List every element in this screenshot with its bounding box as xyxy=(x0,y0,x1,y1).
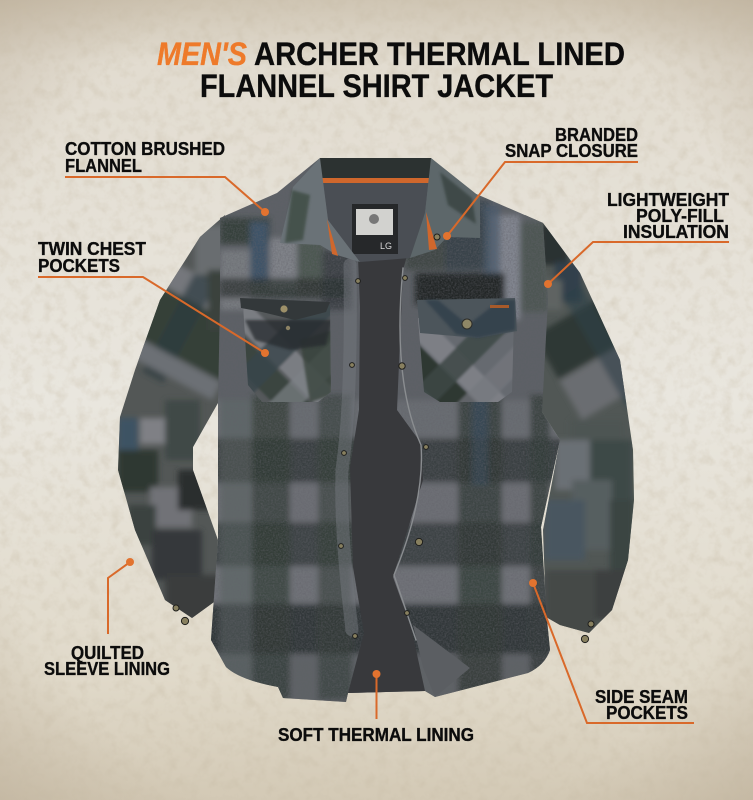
title xyxy=(157,36,625,104)
upper chest blocks xyxy=(220,218,270,244)
title: FLANNEL SHIRT JACKET xyxy=(200,68,553,104)
lining fold at hem xyxy=(413,625,470,697)
callout: lightweight poly-fill insulation xyxy=(544,189,730,288)
jacket illustration xyxy=(114,158,634,702)
callout: twin chest pockets: TWIN CHEST xyxy=(38,238,147,259)
jacket body plaid xyxy=(200,150,570,710)
callout: quilted sleeve lining xyxy=(44,558,170,679)
callout: quilted sleeve lining: QUILTED xyxy=(71,642,144,663)
callout: branded snap closure: SNAP CLOSURE xyxy=(505,140,638,161)
callout: lightweight poly-fill insulation: LIGHTWEIGHT xyxy=(607,189,730,210)
callout: branded snap closure xyxy=(443,124,638,240)
right chest pocket xyxy=(417,298,517,402)
callout: cotton brushed flannel: COTTON BRUSHED xyxy=(65,138,225,159)
callout: twin chest pockets: POCKETS xyxy=(38,255,120,276)
callout: cotton brushed flannel xyxy=(65,138,269,216)
callout: side seam pockets: SIDE SEAM xyxy=(595,686,688,707)
neck lining xyxy=(320,160,431,262)
vertical stripes (mid/lower body) xyxy=(220,400,252,700)
right sleeve xyxy=(525,215,634,633)
callout: twin chest pockets xyxy=(38,238,269,357)
orange collar tape xyxy=(319,178,432,183)
callout: side seam pockets xyxy=(529,579,694,723)
thermal lining xyxy=(348,252,425,693)
title: ARCHER THERMAL LINED xyxy=(254,36,625,72)
callout: lightweight poly-fill insulation: INSULATION xyxy=(623,221,729,242)
callout: quilted sleeve lining: SLEEVE LINING xyxy=(44,658,170,679)
left sleeve xyxy=(118,215,225,618)
brand tag xyxy=(352,204,398,254)
callout: cotton brushed flannel: FLANNEL xyxy=(65,155,142,176)
callout: side seam pockets: POCKETS xyxy=(606,702,688,723)
inner collar band xyxy=(320,158,431,178)
callout: lightweight poly-fill insulation: POLY-FILL xyxy=(636,205,724,226)
horizontal stripes xyxy=(200,400,570,438)
callout: soft thermal lining xyxy=(278,670,474,745)
left collar leaf xyxy=(280,158,360,262)
snap buttons xyxy=(173,234,594,643)
placket edges xyxy=(342,265,421,640)
left chest pocket xyxy=(240,298,331,402)
title: MEN'S xyxy=(157,36,248,72)
orange inner collar trims xyxy=(327,212,437,256)
callout: soft thermal lining: SOFT THERMAL LINING xyxy=(278,724,474,745)
brand tag: LG xyxy=(380,241,392,251)
right collar leaf xyxy=(410,158,480,258)
callout: branded snap closure: BRANDED xyxy=(555,124,638,145)
